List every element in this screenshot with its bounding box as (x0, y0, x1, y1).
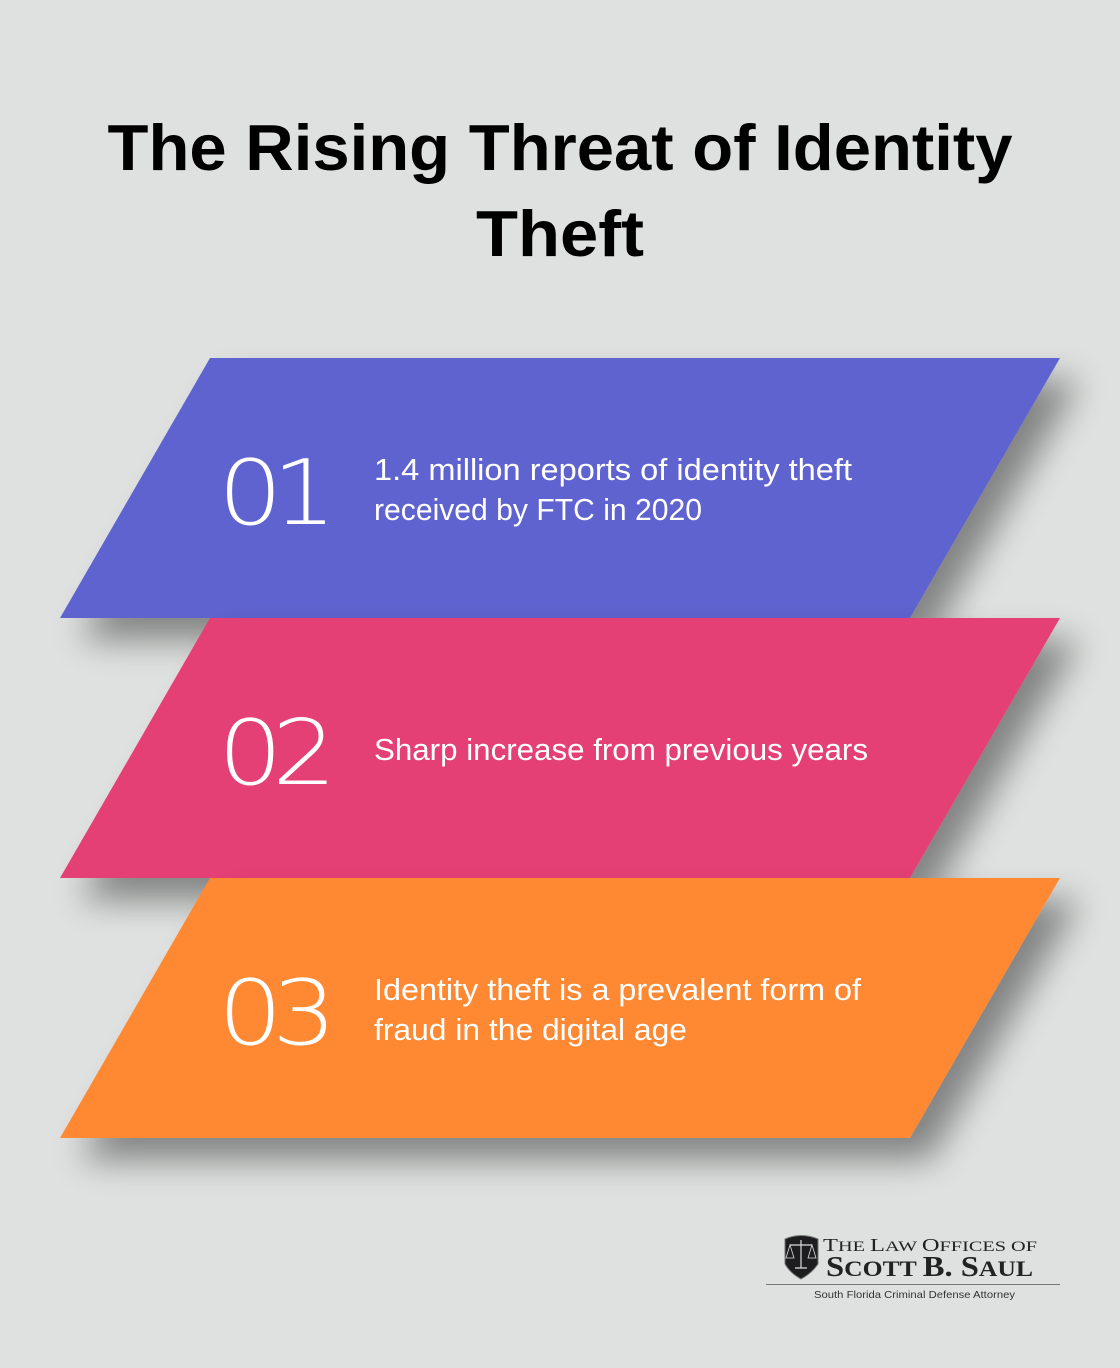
text: step 01 (374, 452, 852, 527)
number 03: 3 (272, 961, 337, 1066)
number 02: 0 (218, 701, 283, 806)
text: step 03 (374, 972, 861, 1047)
number 02 (218, 701, 337, 806)
number 03: 0 (218, 961, 283, 1066)
text: step 01: 1.4 million reports of identity theft (374, 452, 852, 487)
text: step 03: fraud in the digital age (374, 1012, 687, 1047)
text: step 03: Identity theft is a prevalent form of (374, 972, 861, 1007)
number 03 (218, 961, 337, 1066)
band: pink parallelogram (60, 618, 1060, 878)
logo divider (766, 1284, 1060, 1285)
logo text: SCOTT B. S AUL (826, 1252, 1033, 1283)
logo text (823, 1235, 1037, 1283)
logo: law offices (766, 1235, 1060, 1301)
text: step 02: Sharp increase from previous years (374, 732, 868, 767)
text: step 01: received by FTC in 2020 (374, 492, 702, 527)
icon: shield with scales (785, 1236, 818, 1279)
logo text: T HE L AW O FFICES OF (823, 1235, 1037, 1255)
number 01: 1 (272, 441, 337, 546)
band: blue parallelogram (60, 358, 1060, 618)
logo tagline: South Florida Criminal Defense Attorney (814, 1289, 1016, 1301)
panel: step 02 (60, 618, 1060, 878)
band: orange parallelogram (60, 878, 1060, 1138)
panel: step 03 (60, 878, 1060, 1138)
number 01 (218, 441, 337, 546)
number 01: 0 (218, 441, 283, 546)
title: Theft (476, 197, 644, 270)
number 02: 2 (272, 701, 337, 806)
title (108, 111, 1012, 270)
title: The Rising Threat of Identity (108, 111, 1012, 184)
panel: step 01 (60, 358, 1060, 618)
